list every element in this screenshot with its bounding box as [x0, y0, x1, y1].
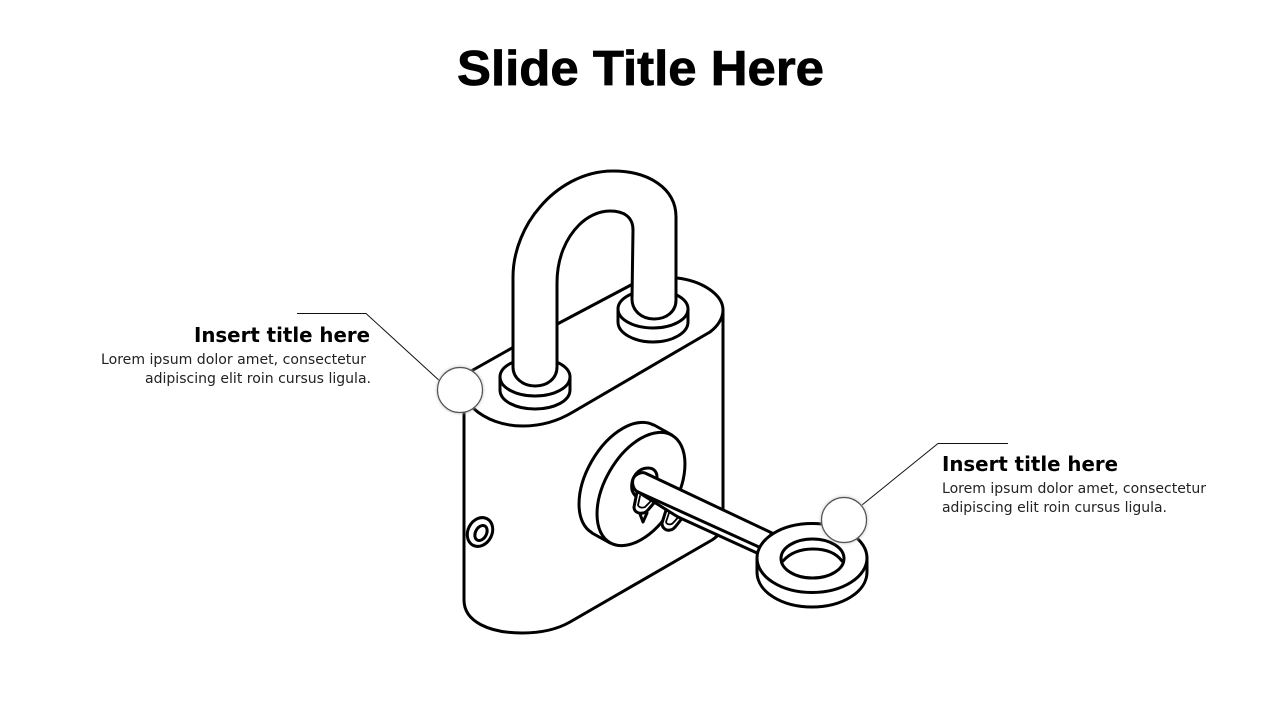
key teeth: [634, 492, 687, 530]
right leader line: [862, 444, 1008, 505]
right callout title: Insert title here: [942, 452, 1118, 476]
left callout text: adipiscing elit roin cursus ligula.: [145, 371, 371, 387]
padlock illustration: [462, 171, 867, 633]
right callout text: Lorem ipsum dolor amet, consectetur: [942, 481, 1206, 497]
key ring: [757, 524, 867, 607]
left leader line: [297, 314, 442, 383]
right callout: [822, 444, 1206, 542]
right marker circle: [822, 498, 866, 542]
right callout text: adipiscing elit roin cursus ligula.: [942, 500, 1167, 516]
left callout text: Lorem ipsum dolor amet, consectetur: [101, 352, 366, 368]
shackle: [513, 171, 676, 386]
key shaft: [633, 473, 772, 553]
keyhole: [632, 468, 657, 498]
left shackle washer: [500, 358, 570, 409]
title: Slide Title Here: [457, 42, 824, 96]
keyhole disc: [561, 407, 703, 561]
left callout: [101, 314, 482, 412]
screw: [462, 513, 498, 551]
right shackle washer: [618, 290, 688, 342]
left marker circle: [438, 368, 482, 412]
right callout text: [942, 481, 1206, 516]
left callout title: Insert title here: [194, 323, 370, 347]
padlock body: [464, 277, 723, 633]
left callout text: [101, 352, 371, 387]
